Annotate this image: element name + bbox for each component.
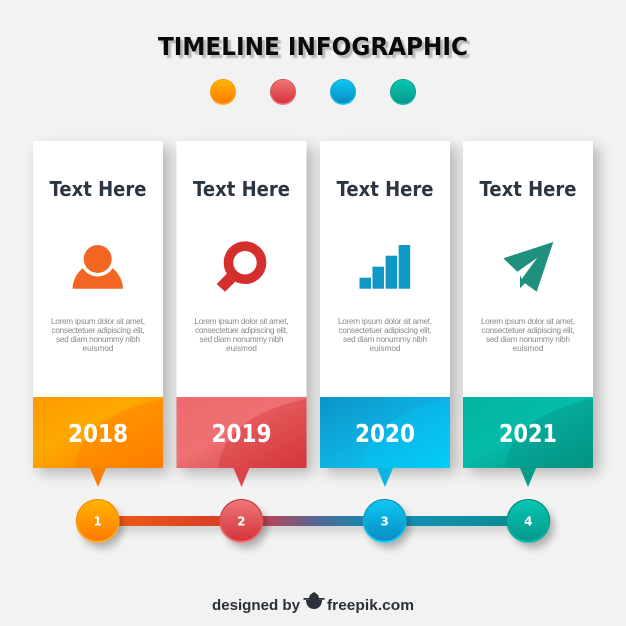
body text: Lorem ipsum dolor sit amet, <box>481 317 575 326</box>
year band <box>320 397 450 487</box>
panel: 2018 <box>33 141 169 487</box>
body text: Lorem ipsum dolor sit amet, <box>194 317 288 326</box>
heading: Text Here <box>336 177 434 201</box>
body text: Lorem ipsum dolor sit amet, <box>51 317 145 326</box>
step 4 <box>506 499 554 548</box>
body text: sed diam nonummy nibh <box>200 335 284 344</box>
step 2 <box>219 499 267 548</box>
year band: 2020 <box>355 419 415 448</box>
legend dots <box>210 79 416 105</box>
panel: 2019 <box>176 141 312 487</box>
body text: sed diam nonummy nibh <box>486 335 570 344</box>
body text: sed diam nonummy nibh <box>343 335 427 344</box>
step 4: 4 <box>524 514 532 528</box>
body text: consectetuer adipiscing elit, <box>338 326 432 335</box>
title: TIMELINE INFOGRAPHIC <box>161 35 471 64</box>
step 1 <box>76 499 123 548</box>
step 2: 2 <box>237 514 245 528</box>
icon: magnifier <box>217 246 262 292</box>
icon: paper plane <box>503 242 553 292</box>
year band <box>176 397 306 487</box>
year band: 2019 <box>212 419 272 448</box>
body text: consectetuer adipiscing elit, <box>195 326 288 335</box>
body text: euismod <box>513 344 544 353</box>
icon: freepik logo <box>304 592 324 609</box>
body text: consectetuer adipiscing elit, <box>52 326 144 335</box>
year band: 2021 <box>499 419 557 448</box>
year band <box>33 397 163 487</box>
heading: Text Here <box>480 177 576 201</box>
footer credit: designed by <box>212 597 301 614</box>
icon: bar chart <box>360 245 410 289</box>
heading: Text Here <box>193 177 290 201</box>
body text: euismod <box>370 344 401 353</box>
body text: consectetuer adipiscing elit, <box>482 326 574 335</box>
body text: sed diam nonummy nibh <box>56 335 140 344</box>
footer credit: freepik.com <box>327 597 414 614</box>
body text: euismod <box>226 344 257 353</box>
icon: person <box>72 242 123 289</box>
panel: 2021 <box>463 141 599 487</box>
timeline connector <box>100 516 530 532</box>
panel: 2020 <box>320 141 456 487</box>
body text: Lorem ipsum dolor sit amet, <box>338 317 432 326</box>
heading: Text Here <box>50 177 146 201</box>
step 3: 3 <box>381 514 389 528</box>
year band <box>463 397 593 487</box>
step 3 <box>363 499 410 548</box>
title: TIMELINE INFOGRAPHIC <box>158 32 468 61</box>
footer credit <box>212 592 414 614</box>
body text: euismod <box>83 344 114 353</box>
step 1: 1 <box>94 514 102 528</box>
year band: 2018 <box>68 419 128 448</box>
